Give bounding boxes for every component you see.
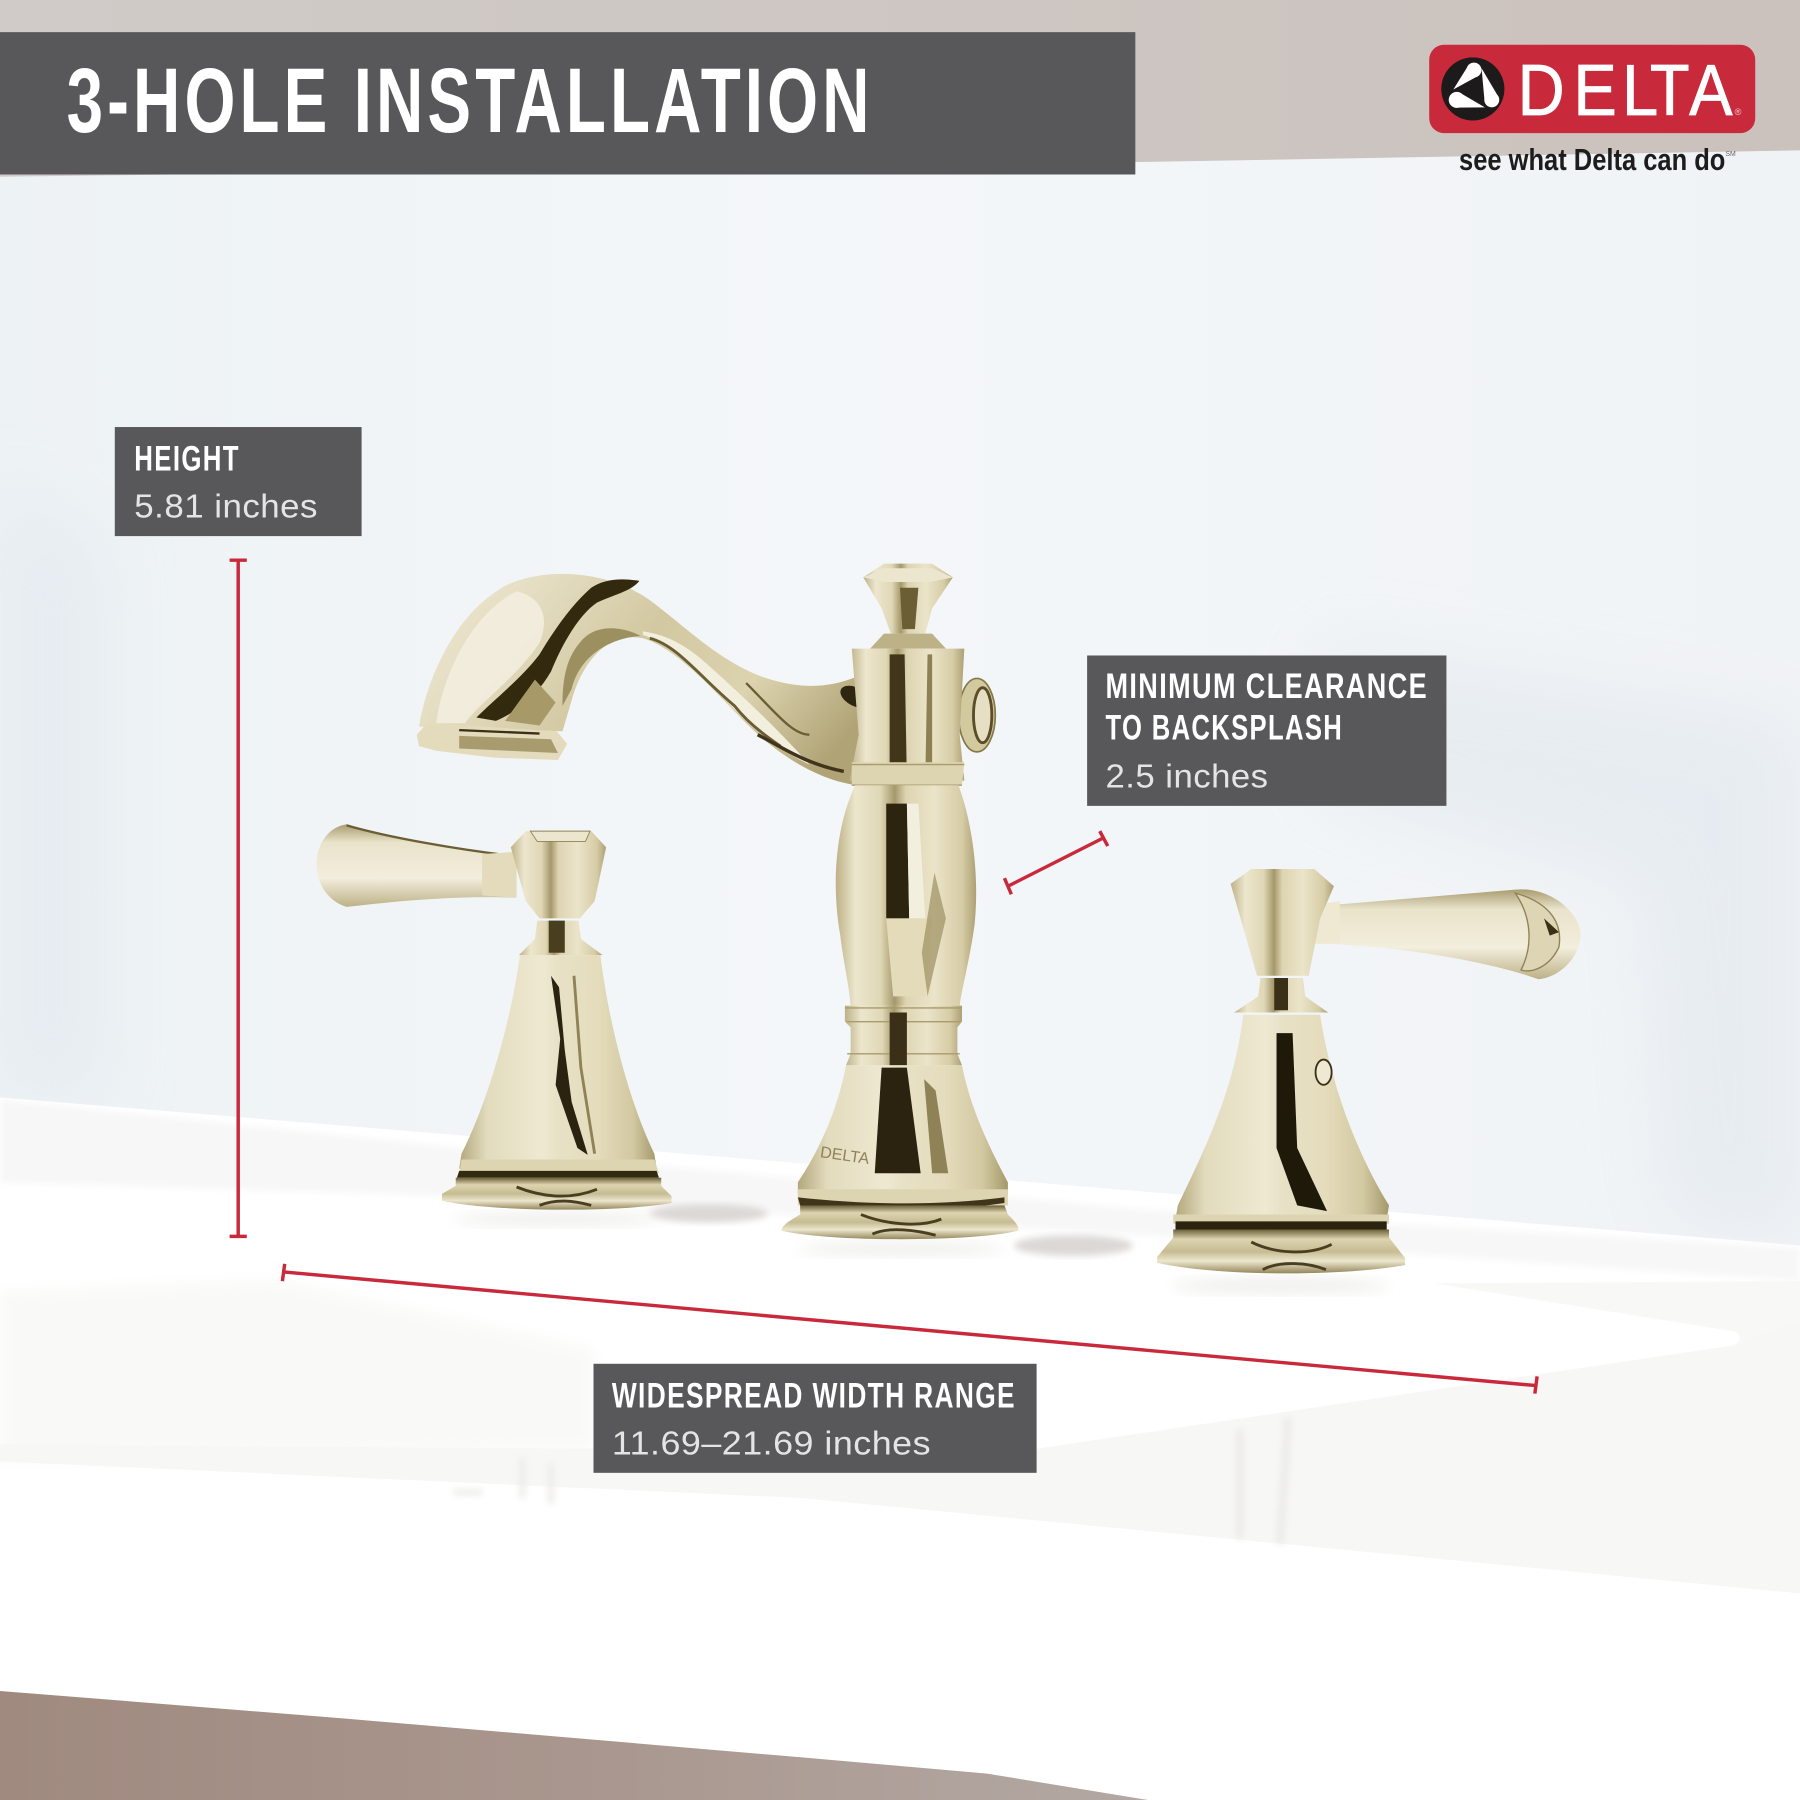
logo wordmark: DELTA [1518,50,1733,131]
spout [419,574,921,786]
height dimension line [230,559,247,1236]
engraved Delta mark: DELTA [819,1143,871,1168]
callout: clearance [1087,655,1446,806]
background: upper wall band [0,0,1800,177]
left handle [317,824,672,1210]
wall shadows [0,482,1800,1240]
title banner [0,32,1135,174]
right handle [1157,869,1581,1273]
countertop holes and reflections [453,1204,1389,1294]
callout: width range [593,1364,1037,1473]
tagline: see what Delta can do [1459,142,1725,177]
Delta logo [1429,45,1755,133]
width value: 11.69–21.69 inches [612,1425,931,1462]
width dimension line [282,1264,1537,1394]
background: sink counter [0,1097,1800,1800]
center column [782,564,1018,1239]
callout: height [115,427,362,536]
title text: 3-HOLE INSTALLATION [67,50,874,152]
spout lip [417,723,567,760]
clearance label line 1: MINIMUM CLEARANCE [1105,666,1428,706]
logo icon [1441,57,1504,121]
height label: HEIGHT [134,439,240,479]
background: floor [0,1691,1148,1800]
clearance value: 2.5 inches [1105,759,1268,796]
registered mark: ® [1735,107,1742,117]
height value: 5.81 inches [134,489,318,526]
rear knob [959,678,995,752]
clearance dimension line [1004,831,1108,894]
width label: WIDESPREAD WIDTH RANGE [612,1375,1016,1415]
clearance label line 2: TO BACKSPLASH [1105,707,1343,747]
service mark: SM [1725,151,1736,158]
faucet [317,564,1581,1273]
